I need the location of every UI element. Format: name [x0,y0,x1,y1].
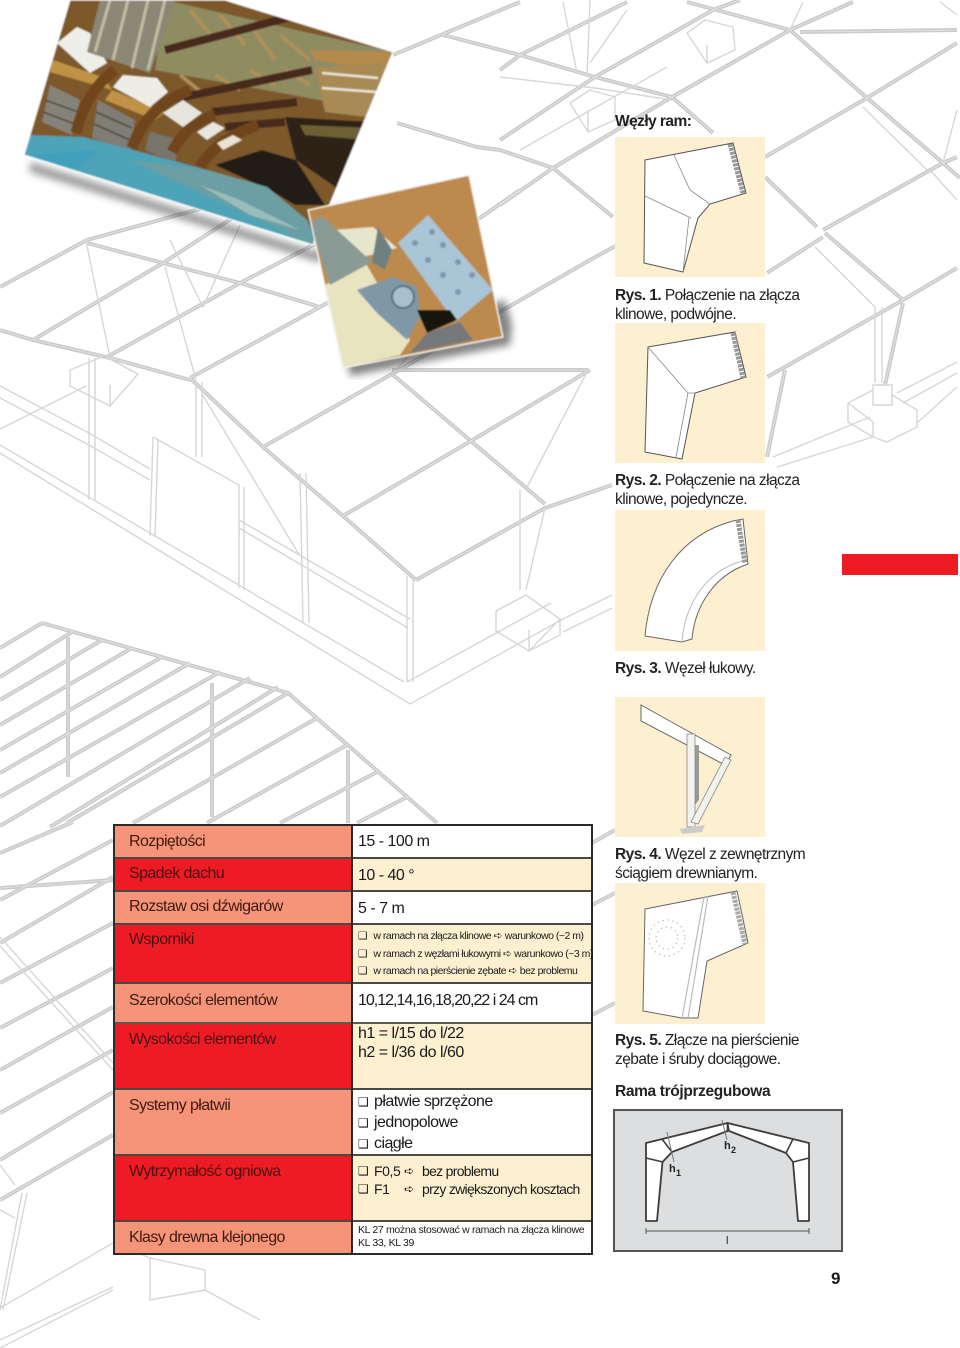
row values: ➪ [404,1182,414,1196]
figure 1: double wedge joint drawing [615,137,765,277]
row values: h1 = l/15 do l/22 [358,1025,464,1042]
diagram: three-hinged frame: h [669,1163,676,1175]
row values: jednopolowe [374,1114,458,1131]
photo: indoor pool with glued-timber arches [24,0,518,380]
row labels: Wytrzymałość ogniowa [129,1163,280,1180]
figure 3: arched joint drawing [615,510,765,651]
row values: 15 - 100 m [358,833,429,850]
row values: przy zwiększonych kosztach [422,1181,580,1197]
caption: figure 1: klinowe, podwójne. [615,306,736,323]
heading: three-hinged frame: Rama trójprzegubowa [615,1083,770,1100]
diagram: three-hinged frame: 1 [676,1168,681,1178]
row values: ❑ [358,1095,369,1109]
diagram: three-hinged frame: 2 [731,1145,736,1155]
row labels: Szerokości elementów [129,992,277,1009]
figure 5: toothed ring joint drawing [615,883,765,1024]
caption: figure 2: klinowe, pojedyncze. [615,491,747,508]
photo: steel bracket connection [306,174,504,368]
caption: figure 5: Rys. 5. Złącze na pierścienie [615,1032,799,1049]
figure 4: joint with external timber tie drawing [615,697,765,837]
row values: bez problemu [422,1163,498,1179]
diagram: three-hinged frame: h [724,1140,731,1152]
row values: KL 33, KL 39 [358,1237,414,1249]
row labels: Rozpiętości [129,833,205,850]
row labels: Wysokości elementów [129,1031,276,1048]
row values: ciągłe [374,1135,413,1152]
row labels: Rozstaw osi dźwigarów [129,898,283,915]
row values: 5 - 7 m [358,900,404,917]
page number: 9 [831,1269,840,1288]
caption: figure 2: Rys. 2. Połączenie na złącza [615,472,800,489]
row values: ❑ [358,1164,369,1178]
row values: h2 = l/36 do l/60 [358,1044,464,1061]
caption: figure 2 [615,472,800,508]
diagram: three-hinged frame [613,1109,843,1252]
row labels: Klasy drewna klejonego [129,1229,285,1246]
red page marker [842,554,958,575]
row values: 10,12,14,16,18,20,22 i 24 cm [358,992,537,1009]
row values: ❑ [358,1116,369,1130]
row values: ❑ w ramach na pierścienie zębate ➪ bez problemu [358,965,577,977]
table: frame parameters [113,824,593,1255]
caption: figure 4: ściągiem drewnianym. [615,865,757,882]
row values: ❑ [358,1137,369,1151]
row values: ❑ w ramach na złącza klinowe ➪ warunkowo (~2 m) [358,930,583,942]
caption: figure 5: zębate i śruby dociągowe. [615,1051,780,1068]
row values [358,833,593,1249]
caption: figure 4: Rys. 4. Węzel z zewnętrznym [615,846,805,863]
caption: figure 4 [615,846,805,882]
heading: frame joints: Węzły ram: [615,113,691,130]
row values: F0,5 [374,1163,400,1179]
diagram: three-hinged frame: l [726,1235,728,1247]
caption: figure 3: Rys. 3. Węzeł łukowy. [615,660,756,677]
row labels: Spadek dachu [129,865,224,882]
row values: 10 - 40 ° [358,867,414,884]
row values: ➪ [404,1164,414,1178]
row values: KL 27 można stosować w ramach na złącza klinowe [358,1224,584,1236]
row values: płatwie sprzężone [374,1093,493,1110]
row labels: Systemy płatwii [129,1097,230,1114]
figure 2: single wedge joint drawing [615,323,765,463]
row labels [129,833,285,1246]
row values: ❑ w ramach z węzłami łukowymi ➪ warunkowo (~3 m) [358,948,593,960]
row values: ❑ [358,1182,369,1196]
caption: figure 1: Rys. 1. Połączenie na złącza [615,287,800,304]
caption: figure 5 [615,1032,799,1068]
row labels: Wsporniki [129,931,194,948]
caption: figure 1 [615,287,800,323]
row values: F1 [374,1181,390,1197]
